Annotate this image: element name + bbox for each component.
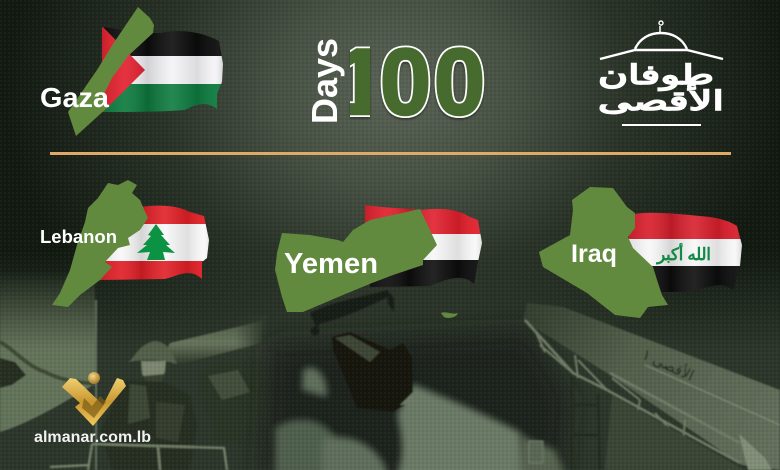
map: Gaza [68,7,154,136]
title: 100 Days [312,40,485,122]
map: Lebanon [52,180,148,307]
title: 100 Days: 0 [434,29,485,134]
flag: Yemen [363,203,485,288]
flag: Iraq [626,210,744,294]
title: 100 Days: 0 [434,29,485,134]
label: Iraq: Iraq [571,240,617,268]
title: 100 Days: 1 [334,29,386,134]
label: Lebanon: Lebanon [40,226,117,247]
photo: sea and ship [262,290,570,470]
logo: Al-Aqsa Flood: الأقصى [598,84,724,116]
map: Yemen [275,209,458,318]
title: 100 Days: 1 [334,29,386,134]
title: 100 Days: 0 [380,29,431,134]
photo: soldier with launcher [50,315,267,470]
logo: Al-Aqsa Flood: طوفان [598,60,714,92]
text on missile: الأقصى ١ [639,345,697,385]
flag: Lebanon [98,203,213,281]
label: Gaza: Gaza [40,82,109,113]
divider line [50,152,731,155]
flag: Palestine [100,25,225,115]
logo: Al-Aqsa Flood [598,21,724,126]
logo: Al-Manar [62,372,126,426]
icon: cedar tree [137,224,175,260]
flag text: takbir: الله أكبر [655,242,711,265]
photo: missile on launcher [520,303,780,470]
website: almanar.com.lb [34,429,151,446]
label: Yemen: Yemen [284,248,378,280]
title: 100 Days: 0 [380,29,431,134]
photo: resistance flag [0,270,97,470]
title: 100 Days: Days [304,38,345,124]
map: Iraq [539,187,668,318]
background photo collage [0,270,780,470]
